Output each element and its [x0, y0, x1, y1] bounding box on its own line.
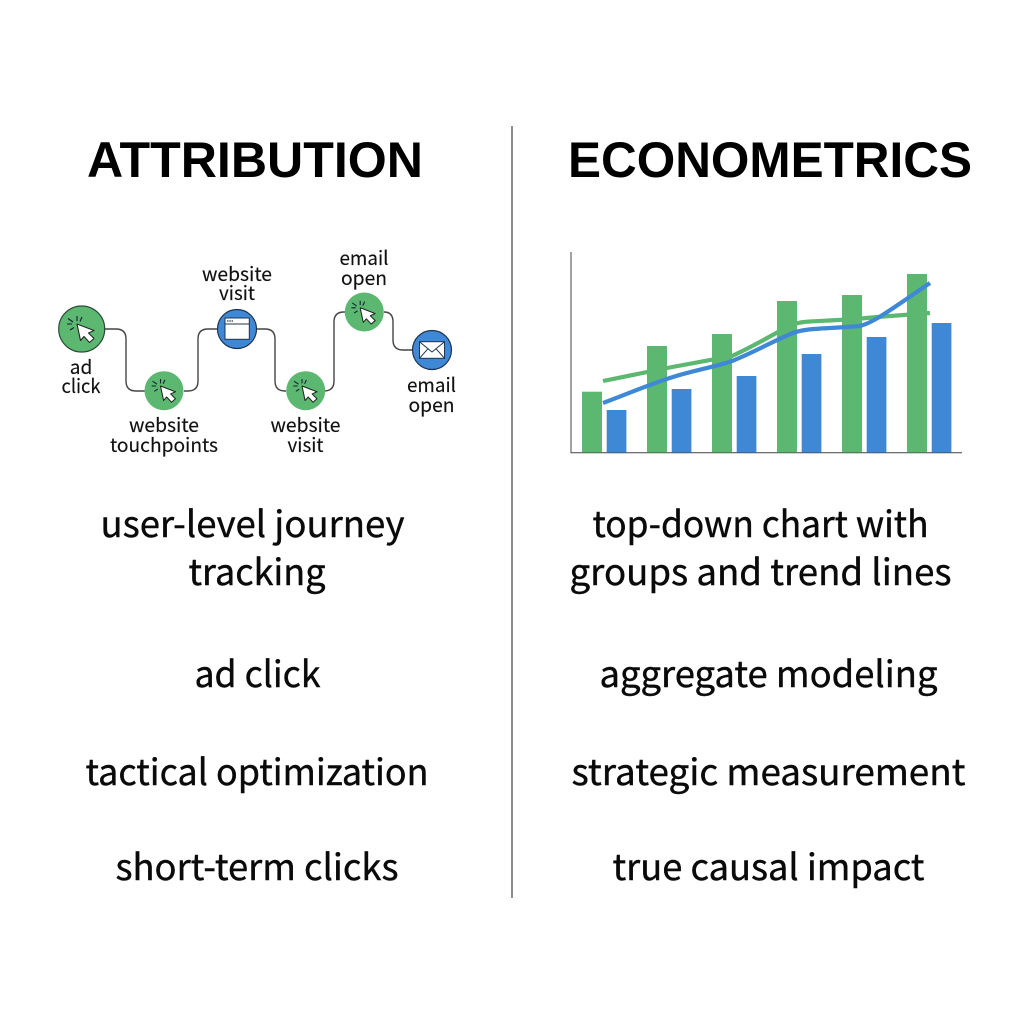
label: email open top: email: [340, 244, 388, 271]
label: website visit bottom: [270, 411, 340, 458]
label: ad click: click: [62, 372, 101, 399]
heading: econometrics: ECONOMETRICS: [568, 132, 972, 188]
icon: website browser node: [218, 310, 256, 348]
text: short-term clicks: short-term clicks: [116, 839, 398, 891]
journey connector path: [105, 312, 412, 391]
label: ad click: [62, 353, 101, 399]
text: top-down chart with groups and trend lines: top-down chart with: [592, 496, 928, 548]
text: top-down chart with groups and trend lines: groups and trend lines: [570, 544, 952, 596]
label: email open bottom: [407, 371, 456, 418]
panel: attribution: [59, 132, 456, 891]
label: website visit top: [202, 260, 272, 306]
heading: attribution: ATTRIBUTION: [87, 132, 423, 188]
label: website visit top: visit: [219, 279, 255, 306]
label: website touchpoints: touchpoints: [110, 431, 218, 458]
text: aggregate modeling: aggregate modeling: [600, 646, 938, 698]
text: user-level journey tracking: [100, 496, 405, 596]
bar and trend chart: [571, 252, 962, 453]
text: top-down chart with groups and trend lines: [570, 496, 952, 596]
label: website visit top: website: [202, 260, 272, 287]
label: email open top: [340, 244, 388, 291]
label: website touchpoints: website: [129, 411, 199, 438]
blue trend line: [603, 283, 930, 403]
icon: website visit click node: [286, 371, 325, 410]
chart axes: [571, 252, 962, 453]
text: ad click: ad click: [194, 646, 321, 698]
label: website touchpoints: [110, 411, 218, 458]
label: ad click: ad: [70, 353, 92, 380]
green bars: [582, 274, 927, 452]
text: true causal impact: true causal impact: [612, 839, 925, 891]
text: tactical optimization: tactical optimization: [86, 744, 428, 796]
green trend line: [603, 313, 930, 381]
label: website visit bottom: website: [270, 411, 340, 438]
journey diagram: [59, 244, 456, 458]
label: email open bottom: email: [407, 371, 456, 398]
text: user-level journey tracking: user-level journey: [100, 496, 405, 548]
label: email open top: open: [341, 264, 387, 291]
label: website visit bottom: visit: [288, 431, 324, 458]
blue bars: [607, 323, 951, 452]
icon: ad click node: [59, 306, 105, 352]
icon: email open click node: [345, 292, 384, 332]
icon: envelope node: [412, 330, 452, 370]
panel: econometrics: [568, 132, 972, 891]
text: strategic measurement: strategic measurement: [572, 744, 966, 796]
icon: touchpoint click node: [144, 371, 184, 410]
label: email open bottom: open: [408, 391, 454, 418]
text: user-level journey tracking: tracking: [188, 544, 326, 596]
